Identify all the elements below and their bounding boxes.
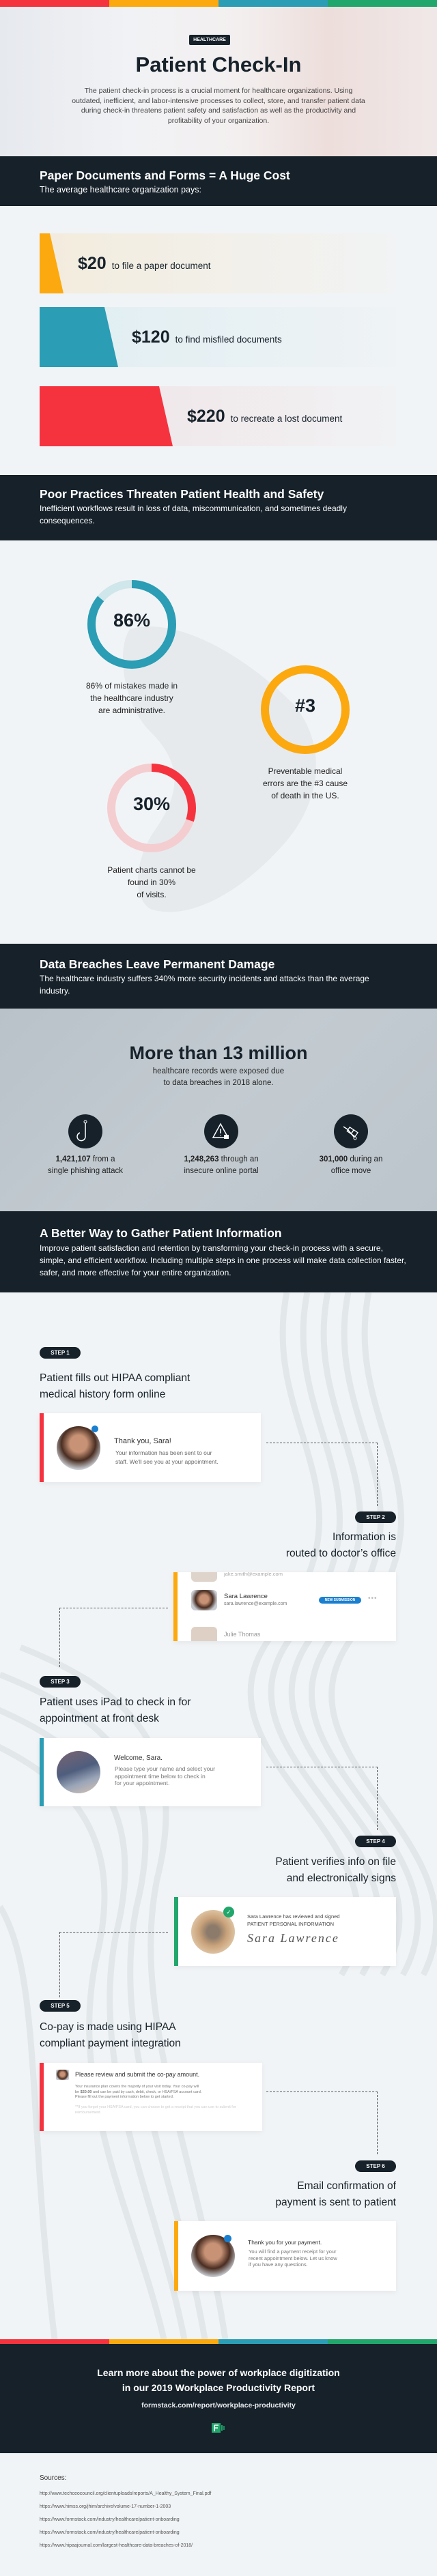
section header: paper documents: Paper Documents and Forms = A Huge Cost: [40, 169, 290, 182]
top colour bar: [0, 0, 437, 7]
caption: 86%: [86, 681, 178, 715]
background blob: [123, 626, 315, 912]
stat: phishing: 1,421,107 from a: [56, 1155, 115, 1163]
caption: 86%: the healthcare industry: [90, 693, 173, 703]
stat subtitle: healthcare records were exposed due: [153, 1067, 284, 1075]
stat: office move: office move: [331, 1167, 371, 1175]
stat: portal: insecure online portal: [184, 1167, 259, 1175]
icon: formstack logo: [212, 2423, 225, 2433]
card: welcome: Welcome, Sara.: [114, 1754, 163, 1762]
step 1: Patient fills out HIPAA compliant: [40, 1372, 190, 1384]
caption: 86%: are administrative.: [98, 706, 165, 715]
card: thank you: staff. We'll see you at your appointment.: [115, 1458, 218, 1465]
card: submissions list: Julie Thomas: [224, 1631, 260, 1638]
card: payment: recent appointment below. Let us know: [249, 2255, 337, 2261]
sources: Sources:: [40, 2474, 66, 2482]
bar: $20: [40, 233, 396, 293]
footer CTA: Learn more about the power of workplace digitization: [97, 2367, 340, 2378]
chart: 86% donut: 86%: [113, 610, 150, 631]
card: signed: Sara Lawrence: [247, 1931, 339, 1945]
caption: 30%: [107, 865, 196, 899]
step 1: medical history form online: [40, 1389, 165, 1400]
card: signed: [174, 1897, 396, 1966]
caption: 30%: Patient charts cannot be: [107, 865, 196, 875]
step 2: routed to doctor’s office: [286, 1548, 396, 1559]
title: Patient Check-In: [136, 53, 301, 76]
wavy background: [0, 1292, 437, 2339]
footer CTA: in our 2019 Workplace Productivity Report: [122, 2382, 315, 2393]
chart: 30% donut: 30%: [133, 794, 170, 814]
stat: office move: 301,000 during an: [320, 1155, 382, 1163]
step 6: Email confirmation of: [297, 2180, 396, 2192]
chart: 30% donut: [107, 764, 196, 852]
sources: https://www.formstack.com/industry/healthcare/patient-onboarding: [40, 2530, 180, 2535]
card: co-pay: be $20.00 and can be paid by cash, debit, check, or HSA/FSA account card.: [75, 2090, 201, 2094]
card: signed: PATIENT PERSONAL INFORMATION: [247, 1920, 334, 1927]
section header: poor practices: Poor Practices Threaten Patient Health and Safety: [40, 487, 324, 501]
card: co-pay: Your insurance plan covers the majority of your visit today. Your co-pay will: [75, 2085, 199, 2089]
hero: [0, 7, 437, 156]
caption: #3: of death in the US.: [271, 791, 339, 800]
card: signed: Sara Lawrence has reviewed and signed: [247, 1913, 340, 1920]
section header: poor practices: [0, 475, 437, 540]
card: payment: if you have any questions.: [249, 2261, 308, 2268]
stat subtitle: to data breaches in 2018 alone.: [163, 1079, 274, 1087]
card: co-pay: Please fill out the payment information below to get started.: [75, 2095, 173, 2099]
arrow: dashed step2 to step3: [59, 1608, 168, 1667]
step 4: and electronically signs: [287, 1872, 396, 1884]
step 5: compliant payment integration: [40, 2038, 181, 2049]
section header: paper documents: [0, 156, 437, 206]
bar: $20: $20 to file a paper document: [78, 254, 211, 273]
footer colour bar: [0, 2339, 437, 2344]
stat: portal: 1,248,263 through an: [184, 1155, 259, 1163]
stat: office move: [320, 1155, 382, 1175]
card: payment: [174, 2221, 396, 2291]
bar: $120: [40, 307, 396, 367]
icon: hand truck: [334, 1114, 368, 1148]
section header: data breaches: Data Breaches Leave Permanent Damage: [40, 957, 274, 971]
card: thank you: Thank you, Sara!: [114, 1437, 171, 1445]
section header: better way: [0, 1211, 437, 1292]
step 2: Information is: [333, 1531, 396, 1543]
card: welcome: for your appointment.: [115, 1780, 169, 1786]
step 5: [40, 2000, 262, 2132]
card: submissions list: Sara Lawrence: [224, 1593, 268, 1600]
stat: portal: [184, 1155, 259, 1175]
step 5: Co-pay is made using HIPAA: [40, 2021, 176, 2033]
section header: data breaches: [0, 944, 437, 1009]
badge: healthcare: HEALTHCARE: [193, 38, 226, 42]
caption: #3: errors are the #3 cause: [263, 779, 348, 788]
card: thank you: [40, 1413, 261, 1482]
sources: https://www.formstack.com/industry/healthcare/patient-onboarding: [40, 2517, 180, 2522]
step 6: STEP 6: [366, 2163, 385, 2169]
chart: 86% donut: [87, 580, 176, 669]
arrow: dashed step1 to step2: [266, 1443, 378, 1506]
section header: paper documents: The average healthcare organization pays:: [40, 185, 201, 194]
big stat: More than 13 million: [129, 1043, 308, 1063]
card: submissions list: [173, 1572, 396, 1641]
card: welcome: [40, 1738, 261, 1806]
arrow: dashed step3 to step4: [266, 1767, 378, 1830]
sources: https://www.himss.org/jhim/archive/volume-17-number-1-2003: [40, 2504, 171, 2509]
step 4: [174, 1836, 396, 1967]
card: submissions list: NEW SUBMISSION: [325, 1598, 355, 1602]
card: submissions list: •••: [368, 1595, 378, 1602]
step 3: Patient uses iPad to check in for: [40, 1696, 191, 1708]
caption: 30%: found in 30%: [128, 878, 175, 887]
step 3: [40, 1676, 261, 1807]
card: welcome: Please type your name and select your: [115, 1765, 215, 1772]
step 3: STEP 3: [51, 1679, 70, 1685]
step 5: STEP 5: [51, 2003, 70, 2009]
footer CTA: [0, 2344, 437, 2453]
caption: #3: [263, 766, 348, 800]
sources: http://www.techceocouncil.org/clientuploads/reports/A_Healthy_System_Final.pdf: [40, 2491, 211, 2496]
intro text: The patient check-in process is a crucial moment for healthcare organizations. Using outdated, inefficient, and labor-intensive processes to collect, store, and transfer patient data during check-in threatens patient safety and satisfaction as well as the productivity and profitability of your organization.: [72, 87, 365, 124]
card: submissions list: sara.lawrence@example.com: [224, 1602, 287, 1606]
step 1: [40, 1347, 261, 1483]
footer CTA: formstack.com/report/workplace-productivity: [141, 2401, 296, 2409]
stat: phishing: single phishing attack: [48, 1167, 123, 1175]
card: co-pay: Please review and submit the co-pay amount.: [75, 2071, 199, 2078]
sources: [40, 2474, 212, 2548]
stat subtitle: [153, 1067, 284, 1087]
section header: better way: Improve patient satisfaction and retention by transforming your check-in process with a secure, simple, and efficient workflow. Including multiple steps in one process will make data collection faster, safer, and more effective for your entire organization.: [40, 1243, 406, 1277]
caption: 30%: of visits.: [137, 890, 167, 899]
step 4: STEP 4: [366, 1838, 385, 1844]
step 4: Patient verifies info on file: [275, 1856, 396, 1868]
step 6: payment is sent to patient: [275, 2197, 396, 2208]
card: co-pay: **If you forgot your HSA/FSA card, you can choose to get a receipt that you can use to submit for reimbursement.: [75, 2105, 236, 2115]
badge: healthcare: [189, 35, 230, 45]
section header: data breaches: The healthcare industry suffers 340% more security incidents and attacks than the average industry.: [40, 974, 369, 996]
chart: #3 ring: #3: [295, 695, 315, 716]
panel: breach stats: [0, 1009, 437, 1211]
caption: 86%: 86% of mistakes made in: [86, 681, 178, 691]
step 2: [173, 1511, 396, 1642]
arrow: dashed step4 to step5: [59, 1932, 168, 1997]
section header: better way: A Better Way to Gather Patient Information: [40, 1226, 282, 1240]
card: welcome: appointment time below to check in: [115, 1773, 206, 1780]
arrow: dashed step5 to step6: [266, 2092, 378, 2154]
card: payment: You will find a payment receipt for your: [249, 2248, 337, 2255]
card: co-pay: [40, 2063, 262, 2131]
icon: hook: [68, 1114, 102, 1148]
icon: warning: [204, 1114, 238, 1148]
bar: $220: $220 to recreate a lost document: [187, 407, 342, 426]
sources: https://www.hipaajournal.com/largest-healthcare-data-breaches-of-2018/: [40, 2543, 193, 2548]
step 1: STEP 1: [51, 1350, 70, 1356]
chart: #3 ring: [261, 665, 350, 754]
bar: $220: [40, 386, 396, 446]
step 3: appointment at front desk: [40, 1713, 159, 1724]
card: thank you: Your information has been sent to our: [115, 1449, 212, 1456]
card: payment: Thank you for your payment.: [248, 2239, 322, 2246]
bar: $120: $120 to find misfiled documents: [132, 328, 282, 347]
step 2: STEP 2: [366, 1514, 385, 1520]
stat: phishing: [48, 1155, 123, 1175]
step 6: [174, 2160, 396, 2291]
card: signed: ✓: [226, 1909, 231, 1915]
section header: poor practices: Inefficient workflows result in loss of data, miscommunication, and sometimes deadly consequences.: [40, 504, 347, 525]
caption: #3: Preventable medical: [268, 766, 342, 776]
